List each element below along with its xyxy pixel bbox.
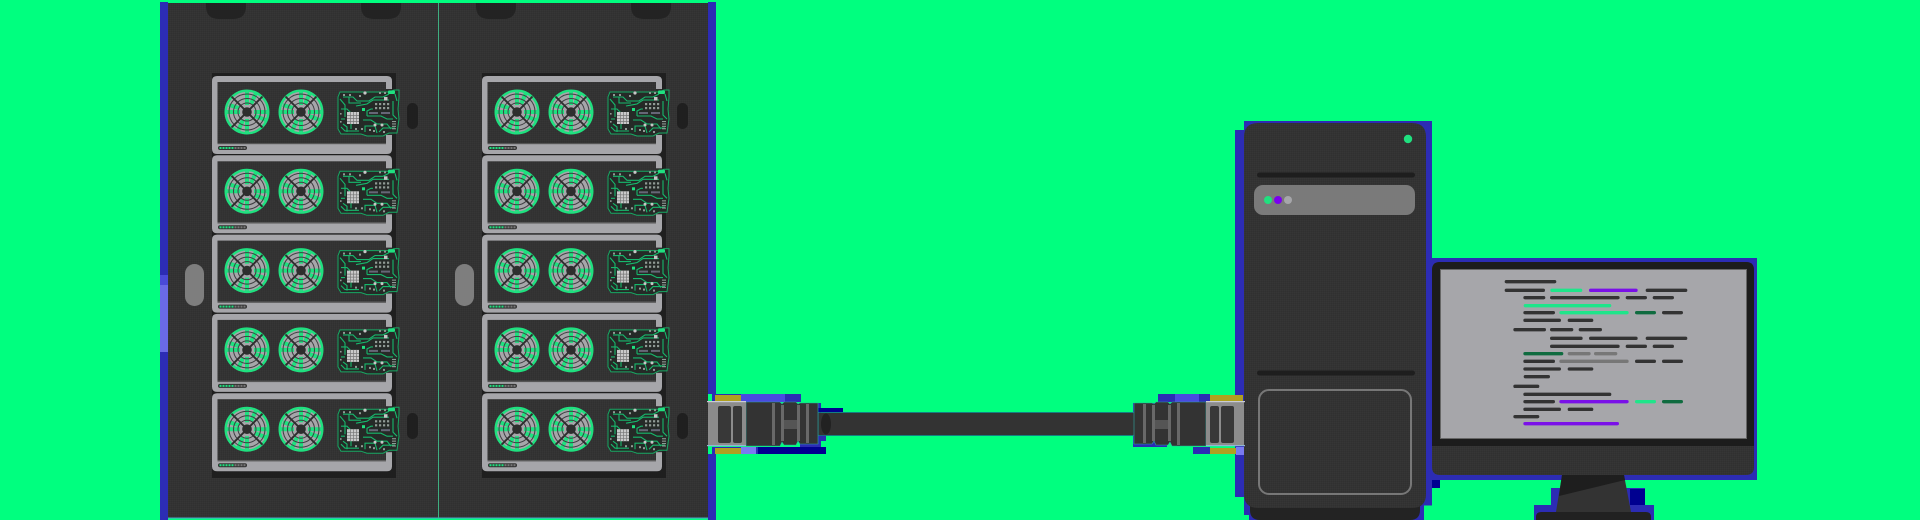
panel: computer tower [1235, 121, 1432, 520]
left connector contacts [715, 395, 741, 454]
monitor backing [1432, 258, 1757, 520]
unit 1 [482, 76, 669, 154]
rack cabinet body [168, 3, 708, 518]
left connector [707, 401, 818, 446]
panel: server rack enclosure [160, 2, 716, 520]
unit 5 [482, 393, 669, 471]
top handles [206, 3, 671, 19]
tower backing [1235, 121, 1432, 520]
unit 2 [482, 155, 669, 233]
unit 4 [212, 314, 399, 392]
power led [1404, 135, 1412, 143]
monitor body [1432, 262, 1754, 475]
code lines on screen [1506, 282, 1686, 424]
screen [1440, 270, 1746, 438]
upper vent [1257, 172, 1415, 178]
drive bay with status lights [1254, 185, 1415, 215]
right connector [1134, 401, 1245, 446]
unit 2 [212, 155, 399, 233]
front panel [1259, 390, 1411, 494]
side latches [407, 103, 688, 439]
panel: right column of mining units [482, 73, 669, 478]
unit 3 [482, 235, 669, 313]
unit 4 [482, 314, 669, 392]
panel: monitor [1432, 258, 1757, 520]
cable strain relief [821, 414, 831, 434]
door grips [185, 264, 474, 306]
tower body [1244, 123, 1426, 508]
unit 1 [212, 76, 399, 154]
tower base [1250, 500, 1420, 520]
panel: left column of mining units [212, 73, 399, 478]
monitor stand [1536, 475, 1651, 520]
monitor bezel [1432, 262, 1754, 446]
right connector contacts [1210, 395, 1243, 454]
unit 5 [212, 393, 399, 471]
unit 3 [212, 235, 399, 313]
connector backing shapes [712, 394, 1244, 455]
cable [818, 412, 1142, 436]
lower vent [1257, 370, 1415, 376]
rack blue side strips [160, 2, 716, 520]
cable with connectors [707, 394, 1245, 455]
